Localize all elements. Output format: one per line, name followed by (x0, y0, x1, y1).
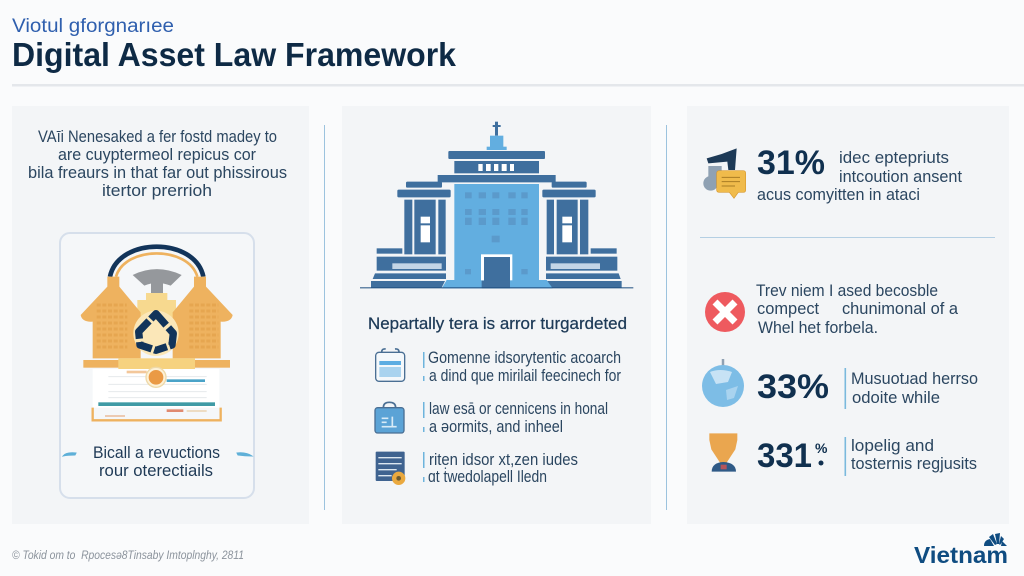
list item 2: a əormits, and inheel (429, 418, 563, 436)
stat: 31% (703, 144, 962, 204)
intro text block (28, 128, 287, 200)
panel: middle institution (342, 106, 651, 524)
list item 2 (375, 400, 608, 436)
stat: 31%: idec eptepriuts (839, 149, 949, 167)
title: Digital Asset Law Framework (12, 36, 457, 73)
panel: right statistics (687, 106, 1009, 524)
card caption: rour oterectiails (99, 461, 213, 480)
list item 3: riten idsor xt,zen iudes (429, 451, 578, 469)
card caption (93, 443, 220, 480)
stat: 331% (709, 433, 977, 476)
intro text block: VAīi Nenesaked a fer fostd madey to (38, 128, 277, 146)
list item 1: a dind que mirilail feecinech for (429, 367, 621, 385)
stat: 33%: odoite while (852, 389, 940, 407)
icon: gavel and note (703, 148, 746, 198)
footer note: © Tokid om to Rpocesǝ8Tinsaby Imtoplnghy, 2811 (12, 548, 244, 562)
icon: red cross (705, 292, 745, 332)
stat: 331%: tosternis regjusits (851, 455, 977, 473)
stat: 33%: 33% (757, 368, 829, 406)
intro text block: itertor prerrioh (102, 182, 212, 200)
stat: 31%: acus comyitten in ataci (757, 186, 920, 204)
list item 2: law esā or cennicens in honal (429, 400, 608, 418)
list item 3: ɑt ṫwedolapell Iledn (428, 467, 547, 486)
middle heading: Nepartally tera is arror turgardeted (368, 314, 627, 333)
list item 3 (376, 451, 578, 486)
icon: clipboard (375, 402, 404, 433)
icon: padlock houses and document (81, 247, 233, 420)
icon: logo fan (984, 533, 1007, 546)
list item 1 (376, 349, 621, 385)
eyebrow subtitle: Viotul ɡforɡnarıee (12, 16, 174, 37)
icon: document with coin (376, 452, 405, 485)
logo: Vietnam: Vietnam (914, 542, 1008, 568)
callout: warning (705, 282, 959, 337)
panel: left overview (12, 106, 309, 524)
icon: trophy (709, 433, 737, 472)
stat: 331%: 331 (757, 437, 812, 475)
card caption: Bicall a revuctions (93, 443, 220, 462)
callout: warning: Trev niem I ased becosble (756, 282, 938, 300)
stat: 33% (702, 359, 978, 409)
stat: 33%: Musuotɹad herrso (851, 370, 978, 388)
stat: 31%: intcoution ansent (839, 168, 962, 186)
intro text block: are cuyptermeol repicus cor (58, 146, 256, 164)
inner card (60, 233, 254, 498)
icon: calendar (376, 349, 405, 381)
list item 1: Gomenne idsorytentic acoarch (428, 349, 621, 367)
icon: globe (702, 359, 744, 407)
stat: 331%: % (815, 440, 828, 456)
stat: 331%: lopelig and (851, 437, 934, 455)
callout: warning: compect chunimonal of a (757, 300, 959, 318)
stat: 31%: 31% (757, 144, 825, 182)
intro text block: bila freaurs in that far out phissirous (28, 164, 287, 182)
header (12, 16, 1024, 86)
icon: government building (360, 122, 633, 288)
callout: warning: Whel het forbela. (758, 319, 878, 337)
